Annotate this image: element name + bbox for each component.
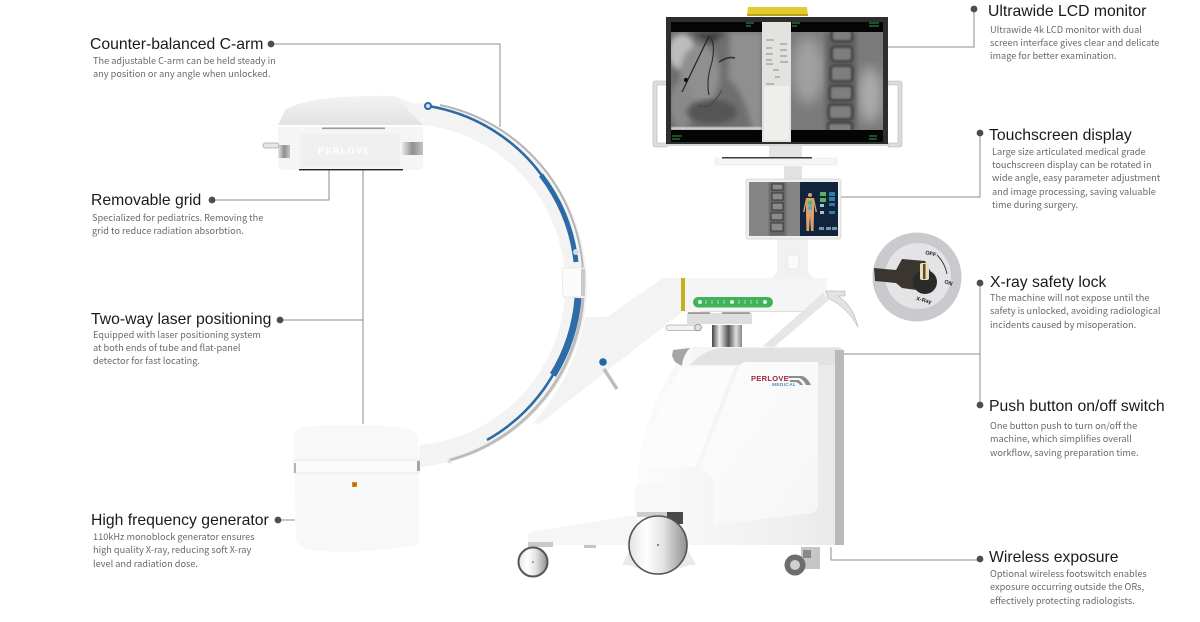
- support column: [770, 238, 816, 279]
- callout: counter-balanced C-arm: any position or any angle when unlocked.: [93, 66, 270, 80]
- main cart: [518, 347, 844, 576]
- generator box: [294, 425, 420, 552]
- callout: ultrawide LCD monitor: [971, 3, 1159, 62]
- callout: wireless exposure: [977, 549, 1147, 607]
- callout: counter-balanced C-arm: [90, 36, 276, 80]
- rear caster: [784, 547, 820, 576]
- blue pivot mid: [573, 249, 579, 255]
- callout: removable grid: grid to reduce radiation absorbtion.: [92, 223, 244, 237]
- callout: push button on/off switch: Push button on/off switch: [989, 398, 1165, 415]
- callout: touchscreen display: [977, 127, 1161, 211]
- callout: push button on/off switch: [977, 398, 1165, 459]
- logo: PERLOVE: [751, 374, 789, 383]
- leader lines: [212, 9, 980, 560]
- callout: two-way laser positioning: [91, 311, 283, 367]
- detector underside: [299, 169, 403, 170]
- callout: ultrawide LCD monitor: Ultrawide LCD monitor: [988, 3, 1146, 20]
- x-ray key lock: [872, 232, 962, 322]
- callout: two-way laser positioning: Equipped with laser positioning system: [93, 327, 261, 341]
- callout: removable grid: Specialized for pediatrics. Removing the: [92, 210, 263, 224]
- base body: [637, 347, 844, 545]
- base leg: [528, 515, 637, 545]
- wheel guard: [635, 484, 685, 513]
- blue stripe upper: [428, 106, 545, 180]
- callout: wireless exposure: effectively protecting radiologists.: [990, 593, 1135, 607]
- callout: counter-balanced C-arm: The adjustable C-arm can be held steady in: [93, 53, 276, 67]
- logo: [751, 374, 811, 388]
- yellow strip: [681, 278, 685, 311]
- detector band: [278, 127, 423, 170]
- body figure: [803, 193, 817, 231]
- front curve highlight: [642, 366, 735, 467]
- right grey band: [835, 350, 844, 545]
- right x-ray: [791, 30, 883, 133]
- key: [874, 259, 933, 291]
- callout: X-ray safety lock: safety is unlocked, avoiding radiological: [990, 303, 1161, 317]
- logo: MEDICAL: [772, 382, 796, 388]
- callout: ultrawide LCD monitor: screen interface gives clear and delicate: [990, 35, 1159, 49]
- x-ray key lock: ON: [943, 279, 953, 288]
- callout: ultrawide LCD monitor: Ultrawide 4k LCD monitor with dual: [990, 22, 1142, 36]
- callout: touchscreen display: and image processing, saving valuable: [992, 184, 1156, 198]
- callout: wireless exposure: exposure occurring outside the ORs,: [990, 579, 1144, 593]
- touchscreen x-ray: [749, 182, 800, 236]
- callout: touchscreen display: Touchscreen display: [989, 127, 1132, 144]
- callout: touchscreen display: Large size articulated medical grade: [992, 144, 1146, 158]
- callout: push button on/off switch: machine, which simplifies overall: [990, 431, 1132, 445]
- PERLOVE embossed: PERLOVE: [318, 146, 371, 156]
- callout: two-way laser positioning: detector for fast locating.: [93, 353, 200, 367]
- main wheel: [622, 516, 696, 575]
- callout: touchscreen display: touchscreen display can be rotated in: [992, 157, 1152, 171]
- horizontal arm: [683, 278, 827, 312]
- callout: high frequency generator: High frequency generator: [91, 512, 269, 529]
- diagonal strut: [763, 293, 829, 348]
- callout: wireless exposure: Optional wireless footswitch enables: [990, 566, 1147, 580]
- C-arm body: [395, 96, 587, 468]
- callout: push button on/off switch: One button push to turn on/off the: [990, 418, 1137, 432]
- left x-ray: [668, 32, 762, 130]
- callout: ultrawide LCD monitor: image for better examination.: [990, 48, 1116, 62]
- vertical column: [712, 325, 742, 348]
- callout: wireless exposure: Wireless exposure: [989, 549, 1119, 566]
- top shoulder: [690, 348, 844, 365]
- control panel: [762, 22, 791, 142]
- callout: removable grid: Removable grid: [91, 192, 201, 209]
- yellow handle: [747, 7, 808, 16]
- monitor stand: [715, 146, 837, 180]
- callout: touchscreen display: time during surgery.: [992, 197, 1078, 211]
- callout: touchscreen display: wide angle, easy parameter adjustment: [992, 170, 1161, 184]
- callout: high frequency generator: level and radiation dose.: [93, 556, 198, 570]
- callout: X-ray safety lock: incidents caused by misoperation.: [990, 317, 1136, 331]
- C-arm connector: [562, 268, 586, 297]
- callout: two-way laser positioning: at both ends of tube and flat-panel: [93, 340, 241, 354]
- pin: [263, 143, 279, 148]
- hook handle: [826, 291, 858, 327]
- platform: [687, 313, 752, 324]
- callout: X-ray safety lock: X-ray safety lock: [990, 274, 1107, 291]
- callout: high frequency generator: 110kHz monoblock generator ensures: [93, 529, 255, 543]
- x-ray key lock: X-Ray: [916, 296, 933, 306]
- callout: X-ray safety lock: [977, 274, 1161, 331]
- orange indicator: [352, 482, 357, 487]
- callout: push button on/off switch: workflow, saving preparation time.: [990, 445, 1139, 459]
- generator band: [294, 460, 419, 473]
- blue stripe lower: [553, 298, 578, 375]
- detector vents: [322, 128, 385, 129]
- chrome lip: [672, 348, 690, 366]
- swing arm: [533, 238, 858, 425]
- touchscreen display: [746, 179, 841, 239]
- status text: [672, 23, 879, 139]
- bezel: [666, 17, 888, 145]
- side handles: [653, 81, 667, 147]
- left caster: [518, 542, 553, 576]
- callout: counter-balanced C-arm: Counter-balanced C-arm: [90, 36, 263, 53]
- touchscreen buttons: [819, 192, 837, 230]
- callout: high frequency generator: [91, 512, 281, 570]
- callout: two-way laser positioning: Two-way laser positioning: [91, 311, 271, 328]
- callout: removable grid: [91, 192, 263, 237]
- detector dome: [278, 96, 423, 125]
- lock labels: OFF: [925, 250, 937, 259]
- rail highlight: [440, 105, 583, 270]
- diagonal arm: [533, 278, 681, 425]
- detector head: [263, 96, 423, 170]
- lock lever: [666, 325, 700, 330]
- callout: X-ray safety lock: The machine will not expose until the: [990, 290, 1149, 304]
- C-arm gantry: [395, 96, 587, 468]
- grey bands: [402, 142, 423, 155]
- callout: high frequency generator: high quality X-ray, reducing soft X-ray: [93, 542, 251, 556]
- ultrawide monitor: [653, 7, 902, 147]
- side panel: [700, 362, 818, 525]
- blue knob and lever: [599, 358, 617, 389]
- blue pivot top: [424, 102, 432, 110]
- green scale: [693, 297, 773, 308]
